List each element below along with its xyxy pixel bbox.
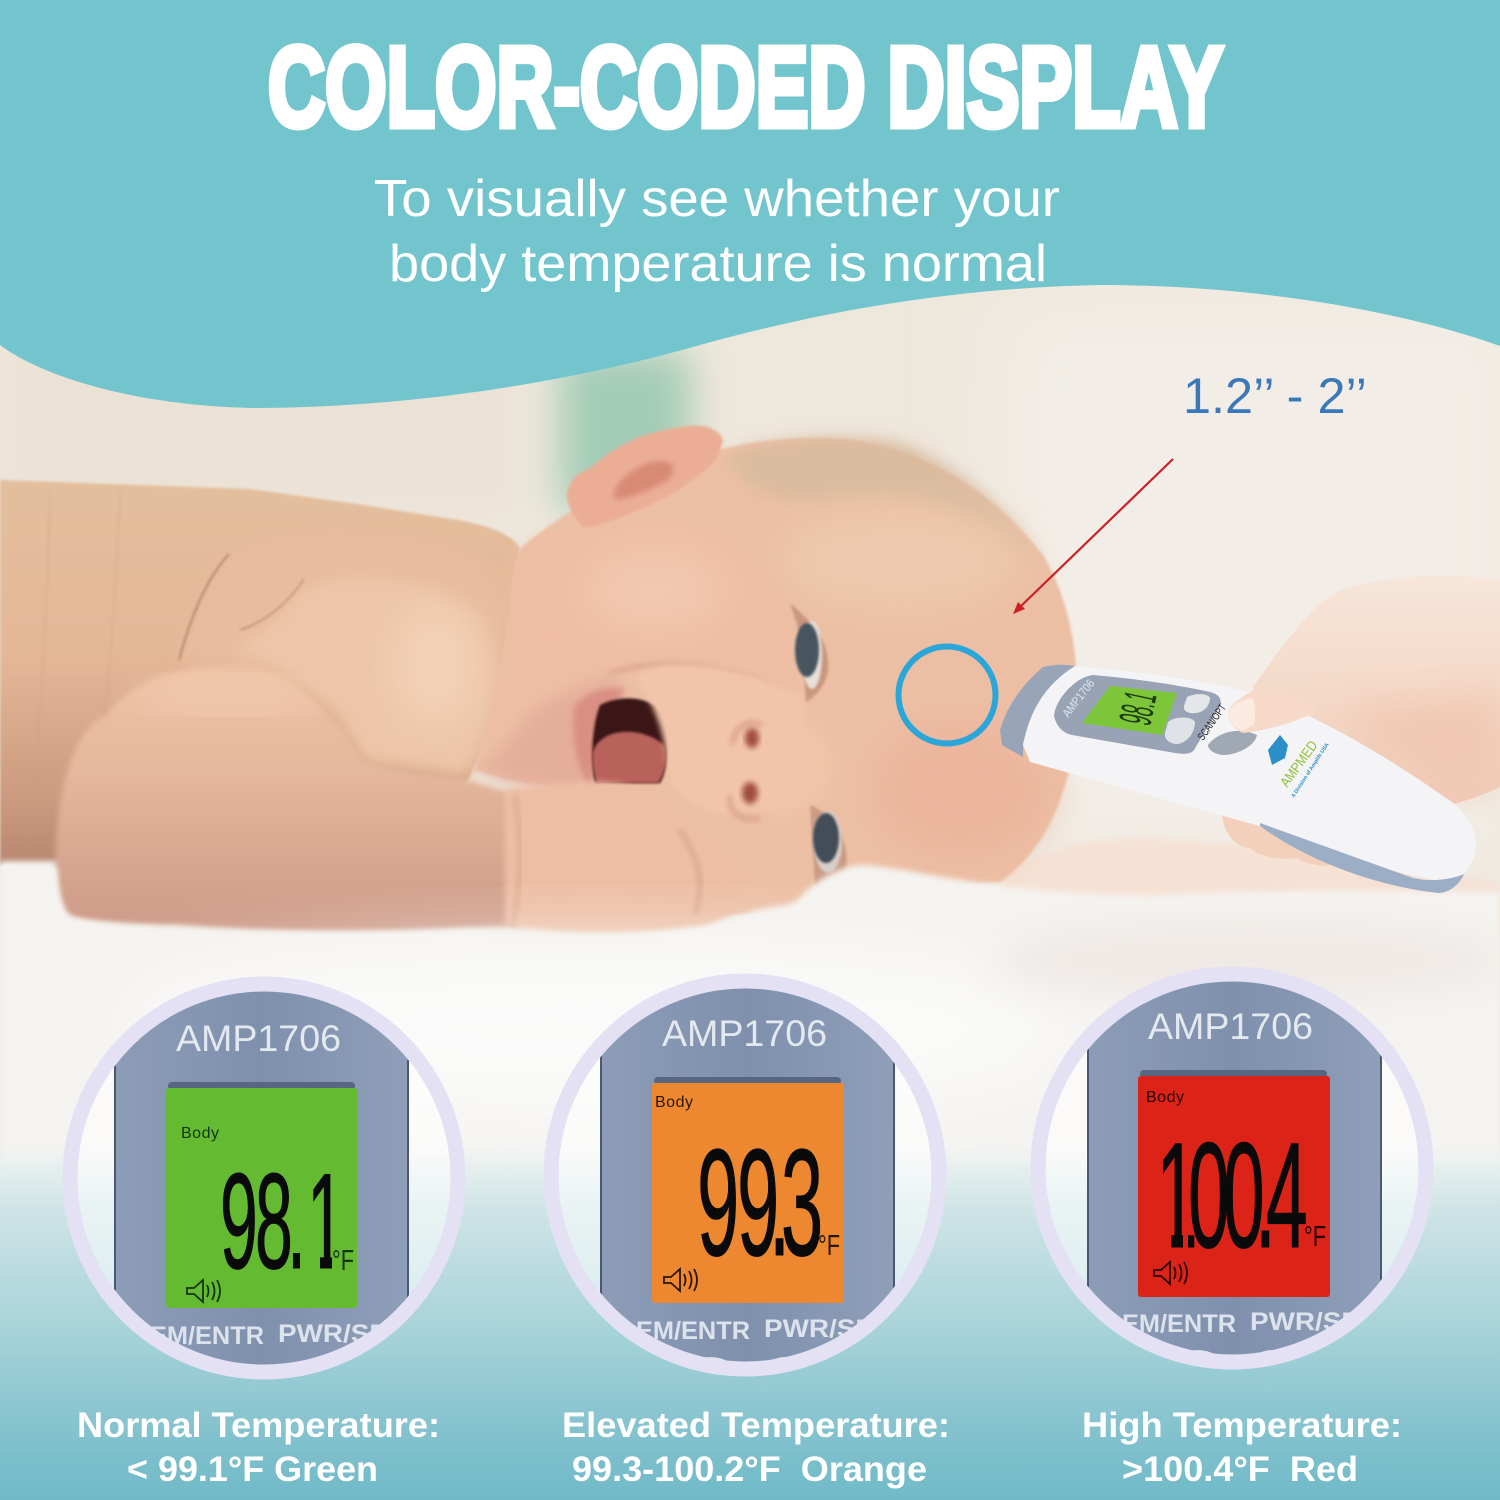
thermometer [1000, 665, 1476, 893]
panel: green normal display: 98.1 [220, 1145, 345, 1297]
scan button label: SCAN/OPT [1196, 702, 1229, 743]
panel: red high display: Body [1146, 1089, 1184, 1106]
caption: elevated temperature: 99.3-100.2°F Orange [572, 1450, 927, 1489]
panel: orange elevated display: PWR/SP [764, 1315, 874, 1343]
subtitle: To visually see whether your [374, 170, 1060, 228]
panel: green normal display: AMP1706 [176, 1018, 341, 1059]
panel: green normal display: °F [332, 1245, 354, 1277]
panel: orange elevated display: °F [818, 1230, 840, 1262]
panel: green normal display: PWR/SP [278, 1320, 388, 1348]
arrow: distance pointer [1013, 459, 1173, 614]
panel: red high display: PWR/SP [1250, 1308, 1360, 1336]
AMPMED logo: AMPMED [1276, 737, 1321, 790]
icon: speaker [1154, 1262, 1187, 1284]
caption: high temperature: High Temperature: [1082, 1406, 1402, 1445]
panel: red high display: AMP1706 [1148, 1006, 1313, 1047]
distance label: 1.2’’ - 2’’ [1183, 368, 1367, 424]
panel: red high display [1038, 968, 1426, 1368]
model label on thermometer: AMP1706 [1059, 676, 1098, 720]
panel: orange elevated display: AMP1706 [662, 1013, 827, 1054]
panel: orange elevated display: Body [655, 1094, 693, 1111]
hand holding thermometer [1222, 576, 1500, 866]
panel: red high display: EM/ENTR [1122, 1310, 1236, 1338]
icon: speaker [664, 1269, 697, 1291]
teal wave header [0, 0, 1500, 408]
target circle on forehead [898, 646, 996, 744]
panel: red high display: °F [1304, 1221, 1326, 1253]
thermometer: 98.1 [1109, 687, 1166, 729]
caption: normal temperature: < 99.1°F Green [127, 1450, 378, 1489]
panel: orange elevated display: 99.3 [697, 1118, 823, 1288]
caption: high temperature: >100.4°F Red [1122, 1450, 1358, 1489]
panel: red high display: 100.4 [1156, 1113, 1308, 1280]
subtitle: body temperature is normal [389, 235, 1047, 293]
caption: normal temperature: Normal Temperature: [77, 1406, 440, 1445]
panel: green normal display [70, 980, 458, 1380]
icon: speaker [187, 1280, 220, 1302]
panel: green normal display: Body [181, 1125, 219, 1142]
logo tagline: A Division of Amplife USA [1291, 742, 1331, 799]
panel: orange elevated display [551, 975, 939, 1375]
panel: orange elevated display: EM/ENTR [636, 1317, 750, 1345]
panel: green normal display: EM/ENTR [150, 1322, 264, 1350]
caption: elevated temperature: Elevated Temperature: [562, 1406, 950, 1445]
